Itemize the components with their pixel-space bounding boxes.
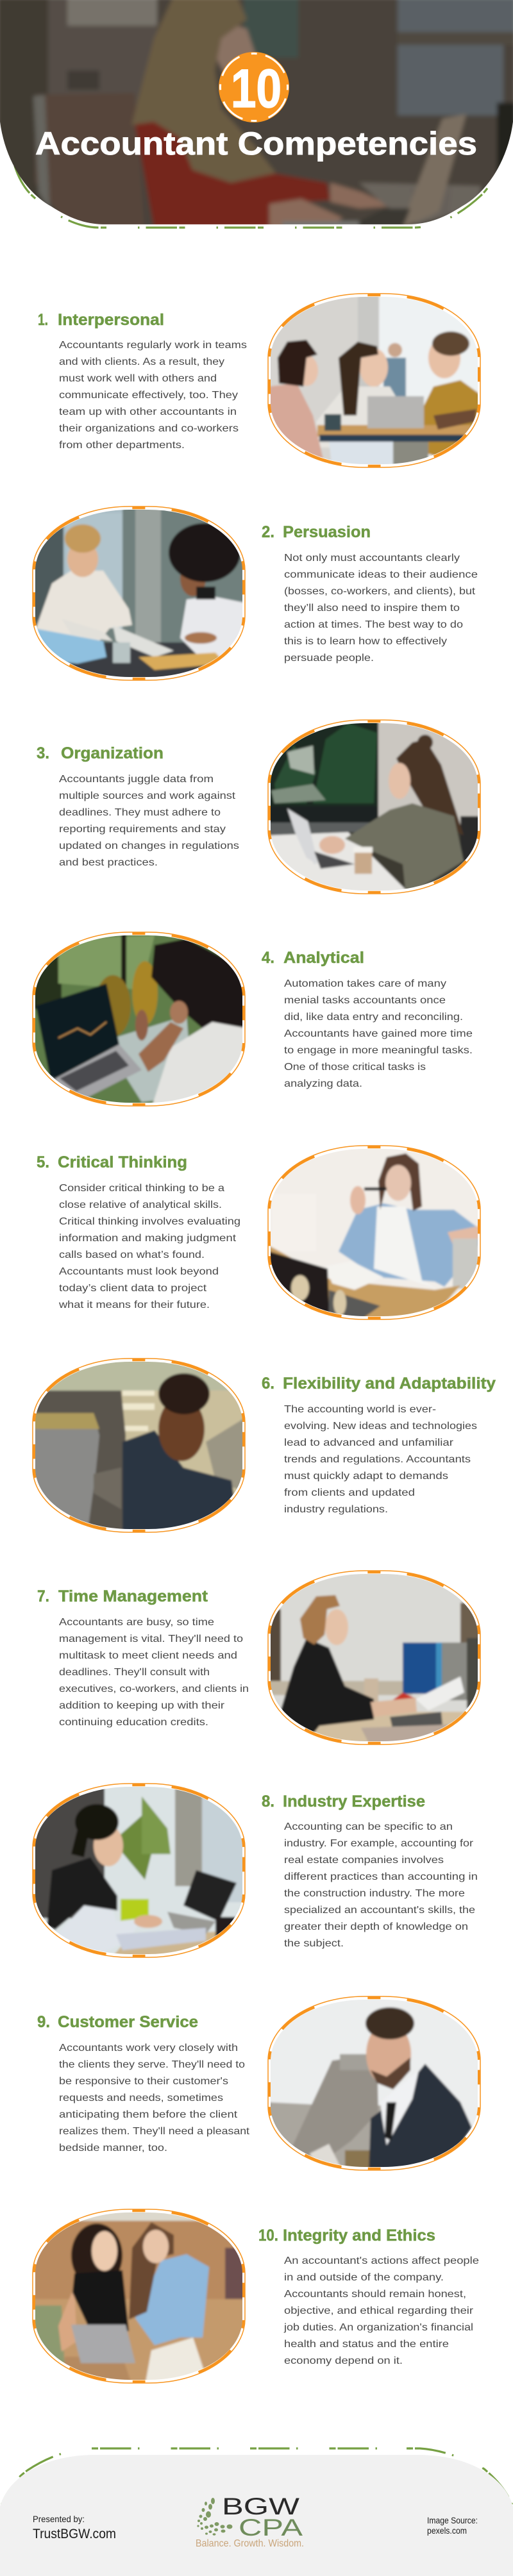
- body text: action at times. The best way to do: [284, 619, 463, 630]
- body text: health and status and the entire: [284, 2339, 449, 2350]
- body text: this is to learn how to effectively: [284, 636, 447, 647]
- heading: Flexibility and Adaptability: [283, 1375, 496, 1393]
- body text: [59, 774, 239, 868]
- panel: 9 Customer Service: [37, 1996, 483, 2173]
- photo: woman working at office window: [268, 1571, 483, 1747]
- photo: woman typing on laptop by plants: [268, 720, 483, 896]
- body text: evolving. New ideas and technologies: [284, 1421, 477, 1432]
- body text: analyzing data.: [284, 1078, 362, 1089]
- heading: 9.: [37, 2013, 50, 2031]
- body text: Accountants should remain honest,: [284, 2289, 466, 2300]
- body text: An accountant's actions affect people: [284, 2255, 479, 2266]
- footer panel: [0, 2448, 513, 2576]
- body text: the subject.: [284, 1938, 344, 1949]
- body text: management is vital. They'll need to: [59, 1634, 243, 1644]
- body text: they’ll also need to inspire them to: [284, 603, 460, 614]
- panel: 1 Interpersonal: [38, 294, 483, 470]
- heading: 2.: [262, 523, 274, 541]
- heading: Critical Thinking: [58, 1153, 187, 1171]
- heading: 1.: [38, 311, 48, 329]
- panel: 6 Flexibility and Adaptability: [33, 1359, 496, 1535]
- title: Accountant Competencies: [35, 126, 477, 162]
- body text: objective, and ethical regarding their: [284, 2305, 474, 2316]
- body text: persuade people.: [284, 653, 374, 664]
- body text: [59, 2043, 250, 2154]
- body text: Consider critical thinking to be a: [59, 1183, 224, 1194]
- heading: Customer Service: [58, 2013, 198, 2031]
- body text: multitask to meet client needs and: [59, 1650, 237, 1661]
- logo wordmark CPA: CPA: [239, 2514, 303, 2541]
- heading: 5.: [37, 1153, 49, 1171]
- body text: real estate companies involves: [284, 1855, 444, 1866]
- body text: multiple sources and work against: [59, 790, 236, 801]
- panel: 8 Industry Expertise: [33, 1784, 478, 1960]
- body text: industry. For example, accounting for: [284, 1838, 474, 1849]
- body text: calls based on what’s found.: [59, 1250, 205, 1260]
- body text: different practices than accounting in: [284, 1871, 478, 1882]
- body text: (bosses, co-workers, and clients), but: [284, 586, 476, 597]
- heading: Analytical: [283, 949, 364, 967]
- heading: Integrity and Ethics: [283, 2227, 435, 2245]
- heading: 10.: [258, 2227, 278, 2245]
- presented by: Presented by:: [33, 2514, 85, 2524]
- photo: woman stressed at trading laptop: [33, 932, 248, 1108]
- body text: menial tasks accountants once: [284, 995, 446, 1006]
- body text: the construction industry. The more: [284, 1888, 465, 1899]
- body text: [284, 553, 478, 664]
- body text: Not only must accountants clearly: [284, 553, 460, 564]
- body text: [284, 1821, 478, 1949]
- body text: greater their depth of knowledge on: [284, 1921, 468, 1932]
- body text: team up with other accountants in: [59, 406, 237, 417]
- body text: addition to keeping up with their: [59, 1700, 225, 1711]
- body text: updated on changes in regulations: [59, 841, 239, 851]
- body text: did, like data entry and reconciling.: [284, 1012, 463, 1023]
- body text: to engage in more meaningful tasks.: [284, 1045, 473, 1056]
- body text: anticipating them before the client: [59, 2109, 238, 2120]
- body text: [59, 1617, 249, 1728]
- body text: deadlines. They must adhere to: [59, 807, 221, 818]
- body text: in and outside of the company.: [284, 2272, 444, 2283]
- body text: their organizations and co-workers: [59, 423, 239, 434]
- body text: specialized an accountant's skills, the: [284, 1905, 475, 1916]
- body text: industry regulations.: [284, 1504, 388, 1515]
- panel: 10 Integrity and Ethics: [33, 2209, 479, 2386]
- body text: and with clients. As a result, they: [59, 356, 224, 367]
- photo: two women laughing with laptop: [33, 2209, 248, 2386]
- body text: executives, co-workers, and clients in: [59, 1684, 249, 1694]
- image source: pexels.com: [427, 2525, 467, 2536]
- body text: job duties. An organization's financial: [283, 2322, 473, 2333]
- presented by: [33, 2514, 116, 2541]
- panel: 3 Organization: [37, 720, 483, 896]
- body text: deadlines. They'll consult with: [59, 1667, 210, 1678]
- heading: Persuasion: [283, 523, 371, 541]
- heading: 8.: [262, 1793, 274, 1811]
- number 10 badge: 10: [231, 58, 282, 119]
- body text: what it means for their future.: [58, 1300, 210, 1310]
- body text: must quickly adapt to demands: [284, 1471, 448, 1482]
- heading: 4.: [262, 949, 274, 967]
- body text: Accountants work very closely with: [59, 2043, 238, 2053]
- logo wordmark BGW: BGW: [222, 2493, 299, 2520]
- body text: [284, 1404, 477, 1515]
- image source: Image Source:: [427, 2515, 478, 2525]
- image source: [427, 2515, 478, 2536]
- body text: today’s client data to project: [59, 1283, 207, 1294]
- body text: reporting requirements and stay: [59, 824, 226, 835]
- body text: The accounting world is ever-: [284, 1404, 436, 1415]
- heading: Interpersonal: [58, 311, 164, 329]
- body text: Accountants juggle data from: [59, 774, 214, 785]
- body text: Critical thinking involves evaluating: [59, 1216, 240, 1227]
- body text: Accountants have gained more time: [284, 1028, 473, 1039]
- body text: trends and regulations. Accountants: [284, 1454, 471, 1465]
- body text: lead to advanced and unfamiliar: [284, 1437, 454, 1448]
- header photo: woman at laptop: [0, 0, 513, 228]
- panel: 4 Analytical: [33, 932, 473, 1108]
- heading: 3.: [37, 744, 49, 762]
- body text: close relative of analytical skills.: [59, 1200, 222, 1210]
- body text: Accountants must look beyond: [59, 1266, 219, 1277]
- body text: One of those critical tasks is: [284, 1062, 426, 1073]
- body text: communicate effectively, too. They: [59, 390, 238, 401]
- body text: continuing education credits.: [59, 1717, 208, 1728]
- logo tagline: Balance. Growth. Wisdom.: [196, 2538, 304, 2549]
- photo: two colleagues reviewing binders: [33, 506, 248, 684]
- heading: 7.: [37, 1587, 49, 1605]
- body text: from other departments.: [59, 440, 185, 451]
- body text: Accountants are busy, so time: [59, 1617, 214, 1628]
- photo: man looking down beside monitor: [33, 1359, 248, 1535]
- panel: 2 Persuasion: [33, 506, 478, 684]
- heading: Time Management: [58, 1587, 208, 1605]
- body text: the clients they serve. They'll need to: [59, 2059, 245, 2070]
- body text: be responsive to their customer's: [59, 2076, 228, 2087]
- body text: Automation takes care of many: [284, 978, 446, 989]
- body text: Accounting can be specific to an: [284, 1821, 453, 1832]
- body text: from clients and updated: [284, 1487, 415, 1498]
- photo: woman using calculator by plant: [33, 1784, 248, 1960]
- footer background: [0, 2455, 513, 2576]
- photo: smiling man in suit: [268, 1996, 483, 2173]
- heading: Organization: [61, 744, 164, 762]
- body text: [284, 978, 473, 1089]
- header green dashed outline: [10, 149, 503, 228]
- body text: requests and needs, sometimes: [59, 2093, 223, 2103]
- photo: team at table: [268, 294, 483, 470]
- body text: [58, 1183, 240, 1310]
- body text: realizes them. They'll need a pleasant: [59, 2126, 250, 2137]
- body text: [283, 2255, 479, 2366]
- heading: 6.: [262, 1375, 274, 1393]
- body text: must work well with others and: [59, 373, 217, 384]
- body text: information and making judgment: [59, 1233, 237, 1244]
- heading: Industry Expertise: [283, 1793, 425, 1811]
- body text: economy depend on it.: [284, 2355, 403, 2366]
- photo: woman thinking at desk: [268, 1146, 483, 1322]
- body text: and best practices.: [59, 857, 158, 868]
- number 10 badge: [219, 52, 289, 122]
- panel: 5 Critical Thinking: [37, 1146, 483, 1322]
- body text: bedside manner, too.: [59, 2143, 167, 2154]
- body text: Accountants regularly work in teams: [59, 340, 247, 351]
- logo: BGW CPA: [196, 2493, 304, 2549]
- presented by: TrustBGW.com: [33, 2527, 116, 2541]
- header banner: [0, 0, 513, 228]
- body text: [59, 340, 247, 451]
- footer green dashed outline: [0, 2448, 513, 2510]
- body text: communicate ideas to their audience: [284, 569, 478, 580]
- panel: 7 Time Management: [37, 1571, 483, 1747]
- logo dots: [197, 2498, 232, 2536]
